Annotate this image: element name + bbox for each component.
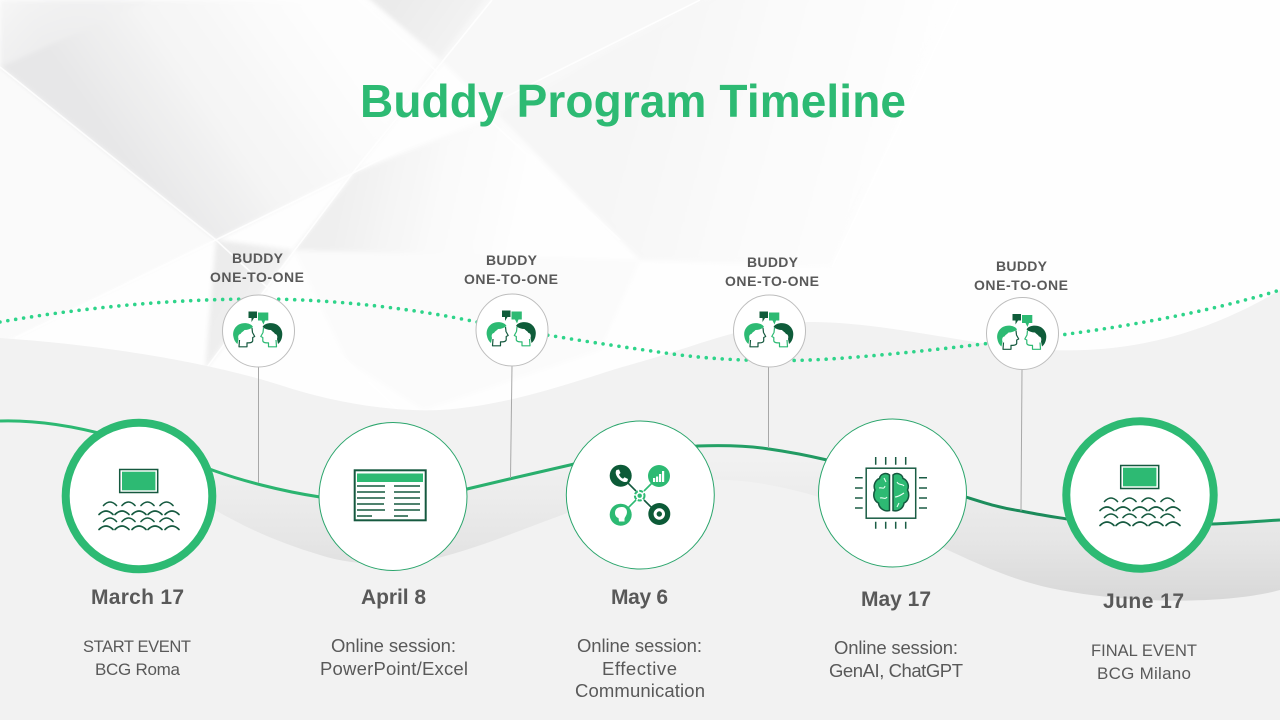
description: Online session: [577,635,702,656]
label [974,258,1068,293]
label: ONE-TO-ONE [725,273,819,289]
circle [986,298,1058,370]
buddy one-to-one 1 [210,250,304,367]
description: Online session: [834,637,958,658]
description [320,635,468,679]
description: Communication [575,680,705,701]
label: BUDDY [996,258,1048,274]
milestone: May 6 [566,421,714,701]
label: ONE-TO-ONE [974,277,1068,293]
description: BCG Roma [95,660,181,679]
milestone: April 8 [319,422,468,679]
circle [734,295,806,367]
milestone: March 17 [66,423,212,679]
date: March 17 [91,586,184,609]
icon: two people talking [487,310,536,346]
icon: audience and screen [1100,466,1180,526]
description [1091,642,1197,683]
icon: document table [355,470,426,520]
description: Online session: [331,635,456,656]
description [829,637,963,681]
label: BUDDY [232,250,284,266]
label: ONE-TO-ONE [464,271,558,287]
description [575,635,705,701]
main timeline curve [0,421,1280,525]
circle [66,423,212,569]
icon: communication network [610,465,670,526]
date: May 17 [861,588,931,611]
buddy one-to-one 3 [725,254,819,367]
description: PowerPoint/Excel [320,658,468,679]
label: BUDDY [747,254,799,270]
circle [222,295,294,367]
label [464,252,558,287]
label: ONE-TO-ONE [210,269,304,285]
description: Effective [602,658,677,679]
description: FINAL EVENT [1091,642,1197,660]
icon: audience and screen [99,470,179,530]
circle [566,421,714,569]
circle [818,419,966,567]
icon: two people talking [997,314,1046,349]
description: START EVENT [83,638,191,656]
milestone: June 17 [1066,421,1214,683]
milestone: May 17 [818,419,966,681]
date: June 17 [1103,590,1184,613]
dotted upper timeline [0,290,1280,361]
label [210,250,304,285]
label: BUDDY [486,252,538,268]
title: Buddy Program Timeline [360,75,906,127]
circle [476,294,548,366]
label [725,254,819,289]
connector lines [258,366,1022,511]
date: May 6 [611,586,668,609]
circle [1066,421,1214,569]
description: GenAI, ChatGPT [829,660,963,681]
icon: two people talking [744,312,793,347]
description [83,638,191,679]
buddy one-to-one 4 [974,258,1068,370]
description: BCG Milano [1097,664,1191,683]
icon: two people talking [233,312,282,347]
circle [319,422,467,570]
buddy one-to-one 2 [464,252,558,366]
date: April 8 [361,586,426,609]
icon: AI chip brain [855,457,927,529]
